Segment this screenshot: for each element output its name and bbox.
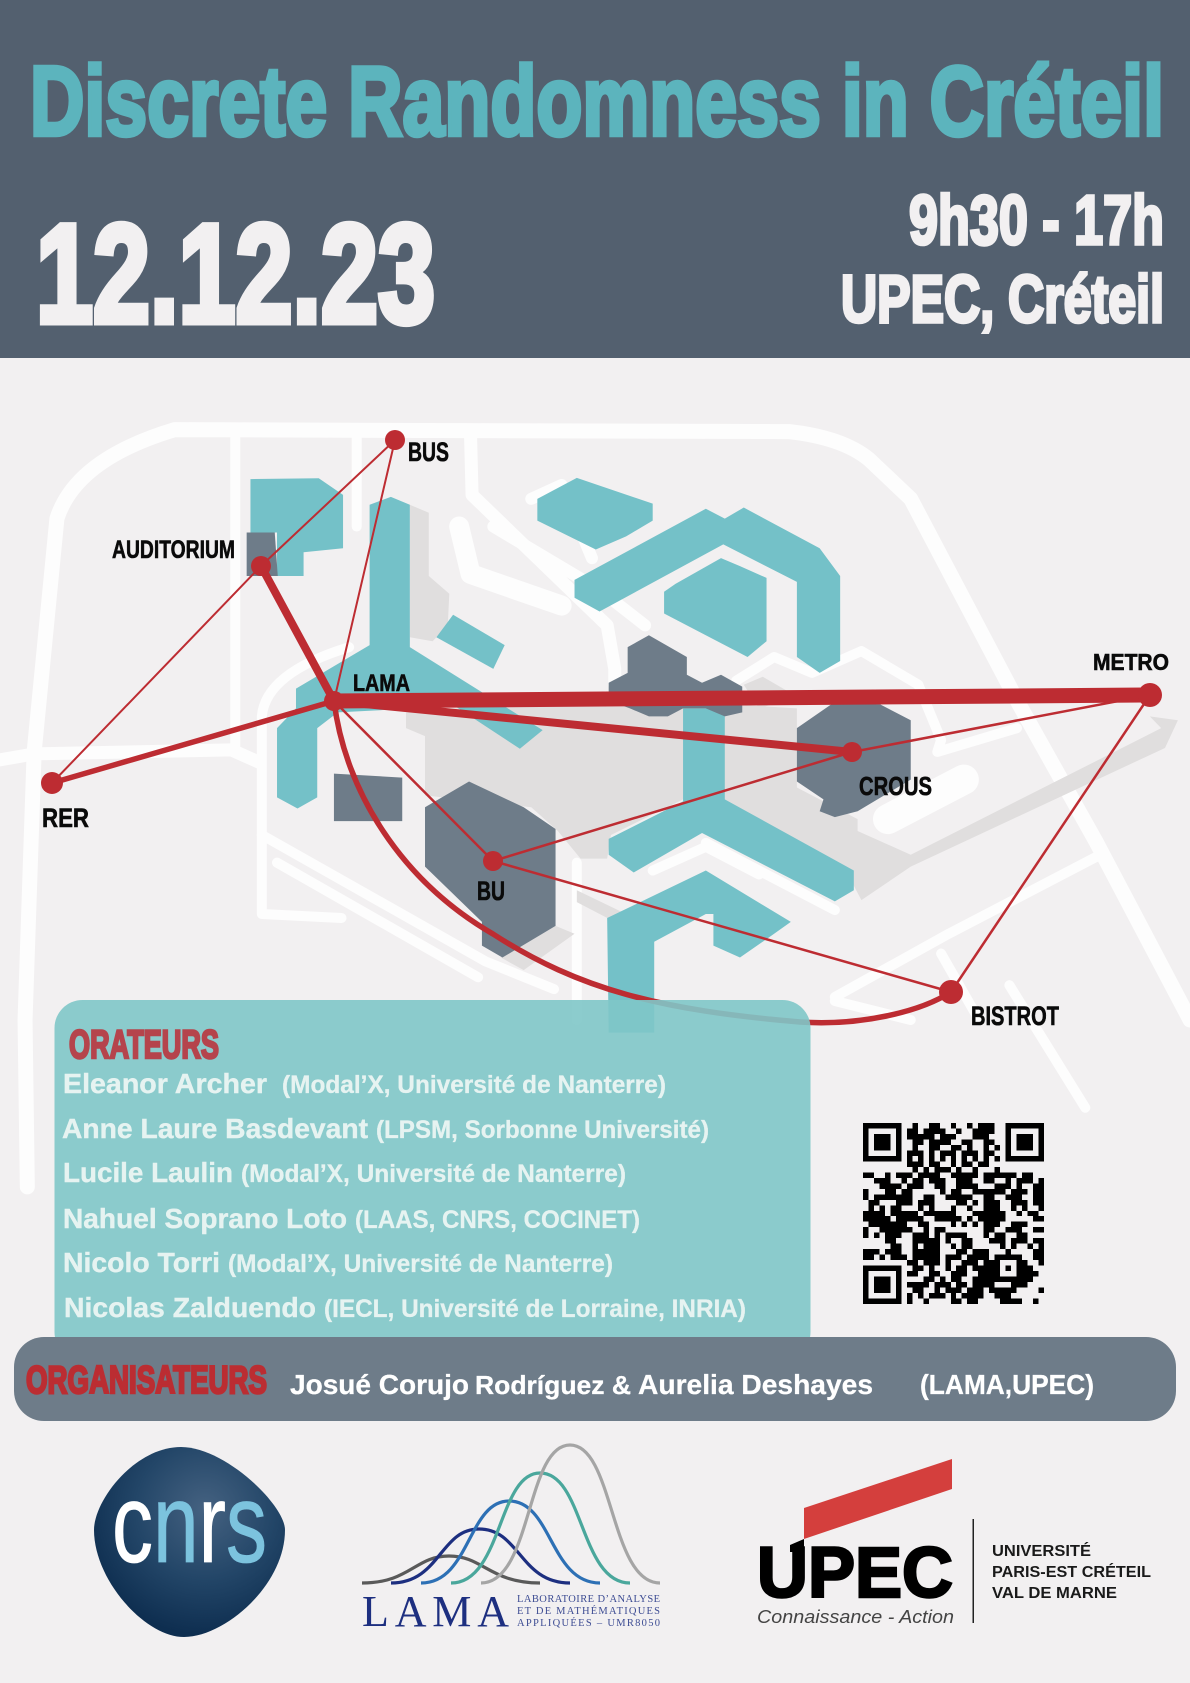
bell curves [362, 1445, 660, 1583]
map slate buildings [247, 532, 911, 958]
speaker: Anne Laure Basdevant: (LPSM, Sorbonne Université) [376, 1116, 709, 1144]
map labels: BUS [408, 437, 449, 467]
map roads [0, 430, 1190, 1187]
speaker: Lucile Laulin [63, 1157, 626, 1188]
map labels [42, 437, 1169, 1031]
separator [972, 1519, 974, 1623]
organisateurs heading: ORGANISATEURS [26, 1359, 267, 1402]
speaker: Anne Laure Basdevant [62, 1113, 709, 1144]
logo: CNRS [94, 1447, 285, 1637]
LAMA descriptor [517, 1594, 660, 1629]
speaker: Nicolas Zalduendo: Nicolas Zalduendo [64, 1292, 316, 1323]
organisers names: Aurelia Deshayes [638, 1369, 873, 1400]
logo: UPEC [757, 1459, 1151, 1627]
organisers affiliation: (LAMA,UPEC) [920, 1369, 1094, 1400]
university name [992, 1541, 1151, 1602]
speaker: Nicolas Zalduendo: (IECL, Université de Lorraine, INRIA) [324, 1295, 746, 1323]
LAMA descriptor: APPLIQUÉES – UMR8050 [517, 1617, 660, 1629]
speaker: Nicolo Torri: Nicolo Torri [63, 1247, 220, 1278]
tagline: Connaissance - Action [757, 1607, 954, 1627]
speaker: Nicolo Torri: (Modal’X, Université de Nanterre) [228, 1250, 613, 1278]
speaker: Nicolas Zalduendo [64, 1292, 746, 1323]
logo: CNRS: cnrs [112, 1461, 267, 1586]
organisers names: Rodríguez & [475, 1370, 631, 1400]
U stem extension [790, 1539, 804, 1552]
speaker: Nahuel Soprano Loto: Nahuel Soprano Loto [63, 1203, 347, 1234]
map labels: RER [42, 803, 89, 833]
speaker: Eleanor Archer: Eleanor Archer [63, 1068, 267, 1099]
map pedestrian shadow areas [406, 505, 1178, 970]
organisers names [290, 1369, 873, 1400]
LAMA descriptor: ET DE MATHÉMATIQUES [517, 1605, 660, 1617]
map labels: LAMA [353, 670, 410, 697]
orateurs heading: ORATEURS [69, 1023, 219, 1067]
UPEC wordmark: UPEC [757, 1534, 953, 1613]
speaker: Lucile Laulin: (Modal’X, Université de Nanterre) [241, 1160, 626, 1188]
map labels: METRO [1093, 649, 1169, 675]
logo: LAMA [362, 1445, 660, 1636]
LAMA descriptor: LABORATOIRE D’ANALYSE [517, 1594, 660, 1605]
map labels: BISTROT [971, 1001, 1059, 1031]
university name: VAL DE MARNE [992, 1585, 1117, 1602]
map labels: BU [477, 876, 505, 906]
map teal buildings [250, 478, 854, 1033]
university name: UNIVERSITÉ [992, 1541, 1091, 1560]
university name: PARIS-EST CRÉTEIL [992, 1562, 1151, 1581]
map labels: AUDITORIUM [112, 536, 235, 564]
speaker: Eleanor Archer [63, 1068, 666, 1099]
speaker: Nahuel Soprano Loto [63, 1203, 640, 1234]
speaker: Nicolo Torri [63, 1247, 613, 1278]
red parallelogram [804, 1459, 952, 1539]
QR code [863, 1123, 1044, 1304]
header band [0, 0, 1190, 358]
speaker: Anne Laure Basdevant: Anne Laure Basdevant [62, 1113, 368, 1144]
map labels: CROUS [859, 771, 932, 801]
organisers names: Josué Corujo [290, 1369, 469, 1400]
panel: organisateurs [14, 1337, 1176, 1421]
LAMA wordmark: LAMA [362, 1587, 509, 1636]
network links [52, 440, 1150, 1023]
panel: orateurs [54, 1000, 810, 1360]
network nodes [41, 430, 1162, 1004]
speaker: Lucile Laulin: Lucile Laulin [63, 1157, 233, 1188]
campus map background [0, 430, 1190, 1187]
speaker: Nahuel Soprano Loto: (LAAS, CNRS, COCINET) [355, 1206, 640, 1234]
date: 12.12.23 [36, 195, 435, 352]
speaker: Eleanor Archer: (Modal’X, Université de Nanterre) [282, 1071, 666, 1099]
